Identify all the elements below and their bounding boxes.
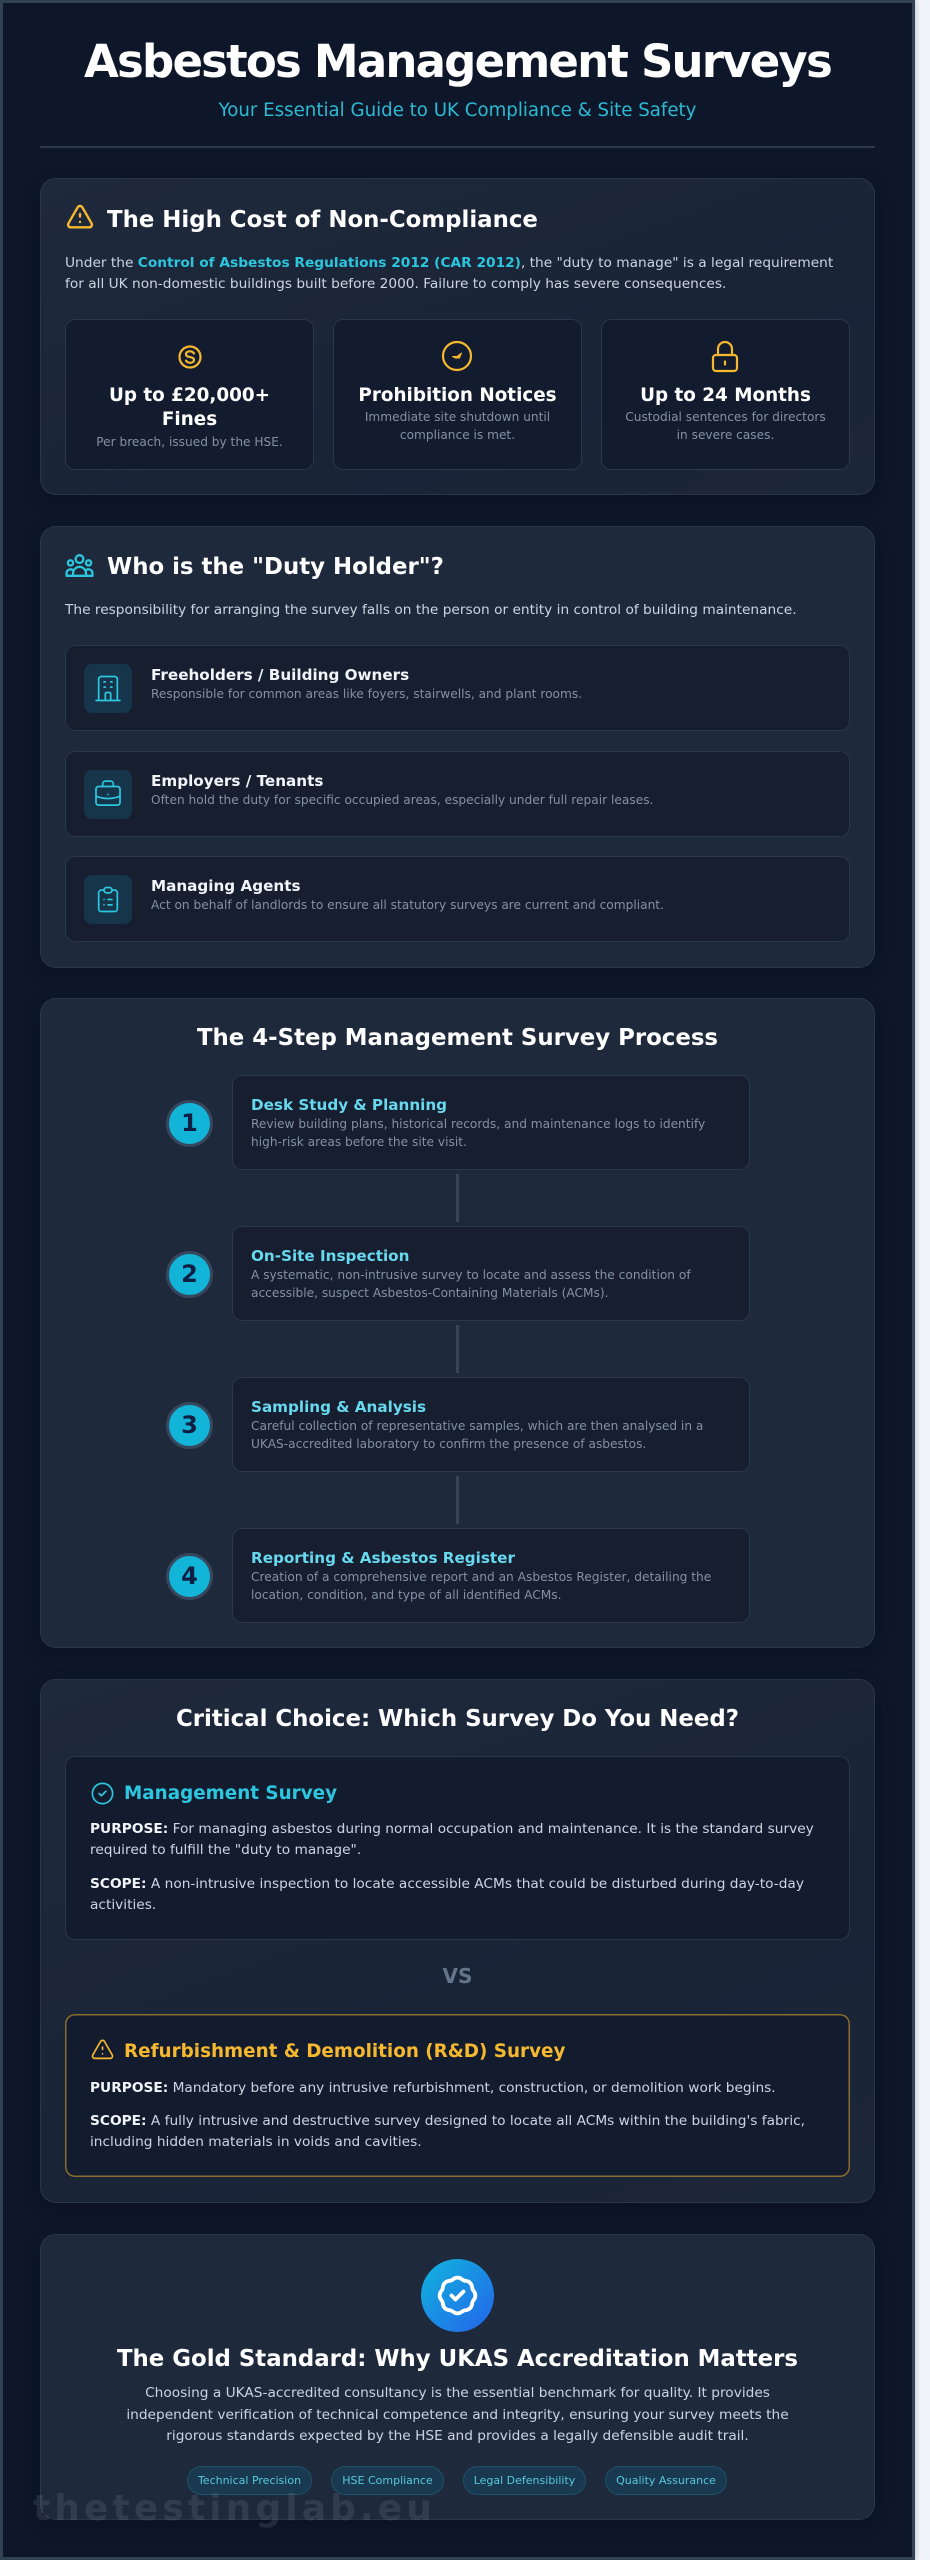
panel: UKAS accreditation (40, 2234, 875, 2520)
intro text: The responsibility for arranging the survey falls on the person or entity in control of building maintenance. (65, 602, 797, 618)
description: Choosing a UKAS-accredited consultancy is the essential benchmark for quality. It provides (145, 2385, 770, 2401)
description: rigorous standards expected by the HSE and provides a legally defensible audit trail. (166, 2428, 749, 2444)
purpose: PURPOSE: Mandatory before any intrusive refurbishment, construction, or demolition work begins. (90, 2080, 776, 2096)
panel: process (40, 998, 875, 1648)
step description: UKAS-accredited laboratory to confirm the presence of asbestos. (251, 1437, 646, 1451)
fines value: Up to £20,000+ (109, 385, 270, 406)
panel: survey comparison (40, 1679, 875, 2203)
custodial note: in severe cases. (677, 428, 774, 442)
row: agents (65, 856, 850, 942)
scope (90, 1876, 804, 1913)
description (126, 2385, 789, 2444)
step title: Reporting & Asbestos Register (251, 1549, 515, 1567)
card: management survey (65, 1756, 850, 1940)
icon: accreditation badge (421, 2259, 494, 2332)
heading: Who is the "Duty Holder"? (107, 554, 444, 580)
prohibition note (365, 410, 550, 442)
row title: Managing Agents (151, 877, 301, 895)
step 1 card (232, 1075, 750, 1170)
row description: Act on behalf of landlords to ensure all statutory surveys are current and compliant. (151, 898, 664, 912)
row title: Employers / Tenants (151, 772, 323, 790)
step 3 card (232, 1377, 750, 1472)
icon: padlock (712, 340, 738, 372)
icon: warning triangle (66, 204, 94, 228)
description: independent verification of technical competence and integrity, ensuring your survey meets the (126, 2406, 789, 2422)
intro text: for all UK non-domestic buildings built before 2000. Failure to comply has severe consequences. (65, 276, 726, 292)
scope: SCOPE: A non-intrusive inspection to locate accessible ACMs that could be disturbed during day-to-day (90, 1876, 804, 1892)
subtitle: Your Essential Guide to UK Compliance & Site Safety (219, 100, 696, 120)
step title: On-Site Inspection (251, 1247, 409, 1265)
custodial note: Custodial sentences for directors (625, 410, 826, 424)
step 1 number (166, 1100, 213, 1146)
step description: accessible, suspect Asbestos-Containing Materials (ACMs). (251, 1286, 608, 1300)
purpose: required to fulfill the "duty to manage". (90, 1842, 361, 1858)
fines note: Per breach, issued by the HSE. (96, 434, 283, 448)
tag: Technical Precision (198, 2474, 301, 2487)
step description (251, 1418, 703, 1451)
tag (331, 2466, 444, 2495)
tag (187, 2466, 312, 2495)
purpose: PURPOSE: For managing asbestos during normal occupation and maintenance. It is the standard survey (90, 1820, 814, 1836)
prohibition note: compliance is met. (400, 428, 515, 442)
step 1 number: 1 (181, 1108, 198, 1136)
panel: non-compliance (40, 178, 875, 495)
icon: people (65, 554, 94, 577)
step description: Review building plans, historical records, and maintenance logs to identify (251, 1116, 705, 1130)
row: freeholders (65, 645, 850, 731)
icon: check circle (92, 1782, 114, 1804)
step 4 number: 4 (181, 1562, 198, 1590)
icon: clipboard (84, 875, 132, 924)
watermark: thetestinglab.eu (33, 2488, 436, 2529)
step description: A systematic, non-intrusive survey to locate and assess the condition of (251, 1268, 691, 1282)
step 2 number (166, 1250, 213, 1298)
icon: coin (178, 345, 202, 369)
tag: HSE Compliance (342, 2474, 433, 2487)
prohibition note: Immediate site shutdown until (365, 410, 550, 424)
icon: building (84, 664, 132, 713)
step description: Careful collection of representative samples, which are then analysed in a (251, 1418, 703, 1432)
row: employers (65, 750, 850, 836)
scope: SCOPE: A fully intrusive and destructive survey designed to locate all ACMs within the building's fabric, (90, 2112, 805, 2128)
title: Asbestos Management Surveys (84, 35, 831, 88)
custodial note (625, 410, 826, 442)
step 2 number: 2 (181, 1260, 198, 1288)
scope (90, 2112, 805, 2150)
tag (605, 2466, 727, 2495)
step 3 number: 3 (181, 1410, 198, 1438)
row description: Responsible for common areas like foyers, stairwells, and plant rooms. (151, 687, 582, 701)
panel: duty holder (40, 526, 875, 968)
intro text: Under the Control of Asbestos Regulations 2012 (CAR 2012), the "duty to manage" is a legal requirement (65, 255, 833, 271)
heading: The 4-Step Management Survey Process (197, 1025, 718, 1051)
step 2 card (232, 1226, 750, 1321)
fines value (109, 385, 270, 430)
step description (251, 1570, 711, 1602)
scope: including hidden materials in voids and cavities. (90, 2134, 422, 2150)
custodial title: Up to 24 Months (640, 385, 811, 406)
tag: Quality Assurance (616, 2474, 716, 2487)
step description: high-risk areas before the site visit. (251, 1135, 467, 1149)
step description (251, 1268, 691, 1300)
prohibition title: Prohibition Notices (358, 385, 557, 406)
tag (463, 2466, 586, 2495)
icon: briefcase (84, 770, 132, 818)
survey title: Refurbishment & Demolition (R&D) Survey (124, 2040, 565, 2062)
card: fines (65, 319, 314, 470)
card: R&D survey (65, 2014, 850, 2177)
survey title: Management Survey (124, 1782, 337, 1804)
vs label: VS (443, 1964, 472, 1988)
heading: The Gold Standard: Why UKAS Accreditation Matters (117, 2346, 798, 2372)
heading: The High Cost of Non-Compliance (107, 206, 538, 232)
icon: notice circle (442, 340, 472, 372)
fines value: Fines (162, 409, 217, 430)
step description (251, 1116, 705, 1149)
heading: Critical Choice: Which Survey Do You Need? (176, 1706, 739, 1732)
row description: Often hold the duty for specific occupied areas, especially under full repair leases. (151, 792, 653, 806)
card: prohibition (333, 319, 582, 470)
card: custodial (601, 319, 850, 470)
step 4 number (166, 1552, 213, 1600)
step description: Creation of a comprehensive report and an Asbestos Register, detailing the (251, 1570, 711, 1584)
row title: Freeholders / Building Owners (151, 666, 409, 684)
tag: Legal Defensibility (474, 2474, 575, 2487)
step 3 number (166, 1402, 213, 1448)
intro text (65, 255, 833, 292)
purpose (90, 1820, 814, 1858)
step description: location, condition, and type of all identified ACMs. (251, 1588, 562, 1602)
scope: activities. (90, 1897, 156, 1913)
step title: Desk Study & Planning (251, 1096, 447, 1114)
icon: warning triangle (92, 2040, 114, 2060)
step 4 card (232, 1528, 750, 1623)
step title: Sampling & Analysis (251, 1398, 426, 1416)
